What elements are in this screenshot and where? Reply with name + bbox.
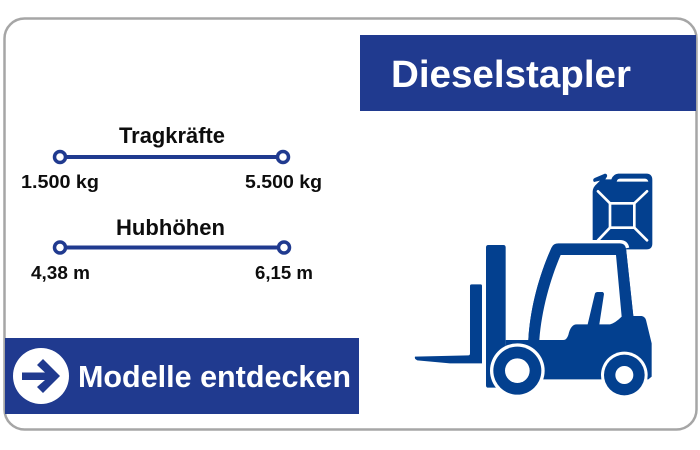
mast bbox=[486, 245, 506, 388]
body and cab bbox=[506, 243, 652, 379]
range: Tragkräfte bbox=[21, 123, 322, 192]
icon: forklift bbox=[415, 243, 652, 398]
range: Hubhöhen bbox=[31, 215, 313, 283]
cab window bbox=[539, 255, 622, 340]
maximum height: 6,15 m bbox=[255, 262, 313, 283]
button: Modelle entdecken bbox=[5, 338, 359, 414]
minimum load: 1.500 kg bbox=[21, 171, 99, 192]
button label: Modelle entdecken bbox=[78, 359, 351, 394]
heading: Tragkräfte: Tragkräfte bbox=[119, 123, 225, 148]
fork bbox=[415, 284, 482, 363]
range line: load capacity bbox=[54, 152, 288, 162]
icon: fuel canister bbox=[593, 174, 652, 249]
front wheel bbox=[490, 343, 545, 398]
icon: arrow in circle bbox=[13, 348, 69, 404]
heading: Hubhöhen: Hubhöhen bbox=[116, 215, 225, 240]
range line: lift height bbox=[54, 242, 290, 253]
icon: forklift with fuel canister bbox=[415, 174, 652, 398]
rear wheel bbox=[601, 352, 648, 398]
title banner: Dieselstapler bbox=[391, 54, 631, 96]
title banner bbox=[360, 35, 696, 111]
maximum load: 5.500 kg bbox=[245, 171, 322, 192]
minimum height: 4,38 m bbox=[31, 262, 90, 283]
